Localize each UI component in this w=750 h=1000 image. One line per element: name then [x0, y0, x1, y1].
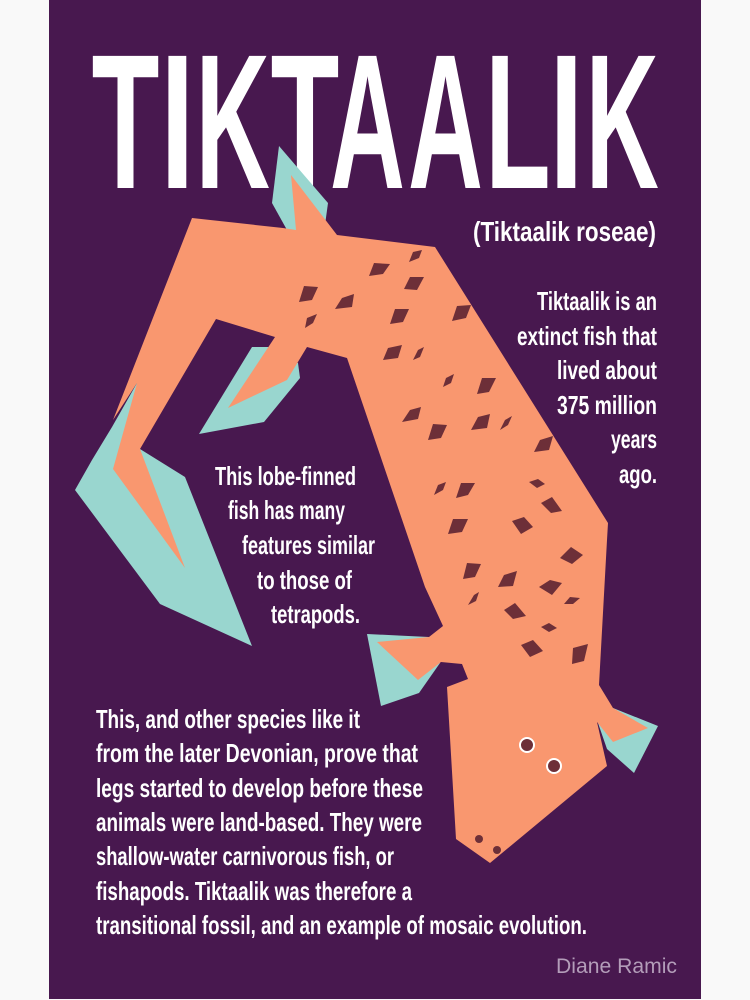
- title: A: [330, 14, 405, 229]
- text block: devonian evolution: legs started to develop before these: [96, 773, 423, 803]
- title: I: [549, 14, 584, 229]
- title: L: [485, 14, 551, 229]
- title: [92, 14, 659, 229]
- text block: extinct fish: 375 million: [557, 390, 657, 420]
- title: K: [586, 14, 659, 229]
- text block: lobe-finned fish: tetrapods.: [271, 599, 360, 629]
- text block: devonian evolution: fishapods. Tiktaalik was therefore a: [96, 876, 412, 906]
- signature: Diane Ramic: [556, 955, 677, 978]
- text block: lobe-finned fish: [215, 461, 375, 629]
- text block: extinct fish: extinct fish that: [517, 321, 657, 351]
- illustration: tiktaalik: [75, 146, 658, 863]
- text block: lobe-finned fish: This lobe-finned: [215, 461, 356, 491]
- body spots: [299, 250, 588, 664]
- text block: extinct fish: Tiktaalik is an: [537, 286, 657, 316]
- text block: extinct fish: lived about: [557, 355, 657, 385]
- text block: devonian evolution: from the later Devonian, prove that: [96, 738, 418, 768]
- text block: devonian evolution: animals were land-based. They were: [96, 807, 422, 837]
- title: T: [92, 14, 159, 229]
- orange body: [113, 175, 648, 863]
- title: I: [160, 14, 195, 229]
- teal fins: [75, 146, 658, 773]
- subtitle: species name: (Tiktaalik roseae): [473, 216, 656, 247]
- title: T: [271, 14, 339, 229]
- text block: devonian evolution: [96, 704, 587, 940]
- text block: extinct fish: [517, 286, 657, 489]
- title: K: [196, 14, 270, 229]
- text block: devonian evolution: This, and other species like it: [96, 704, 360, 734]
- eye: left: [520, 738, 534, 752]
- text block: lobe-finned fish: features similar: [242, 530, 375, 560]
- text block: devonian evolution: shallow-water carnivorous fish, or: [96, 841, 394, 871]
- title: A: [408, 14, 483, 229]
- eye: right: [547, 759, 561, 773]
- text block: lobe-finned fish: fish has many: [228, 495, 345, 525]
- text block: extinct fish: years: [611, 424, 657, 454]
- text block: extinct fish: ago.: [619, 459, 657, 489]
- text block: lobe-finned fish: to those of: [257, 565, 352, 595]
- nostrils: [475, 835, 501, 854]
